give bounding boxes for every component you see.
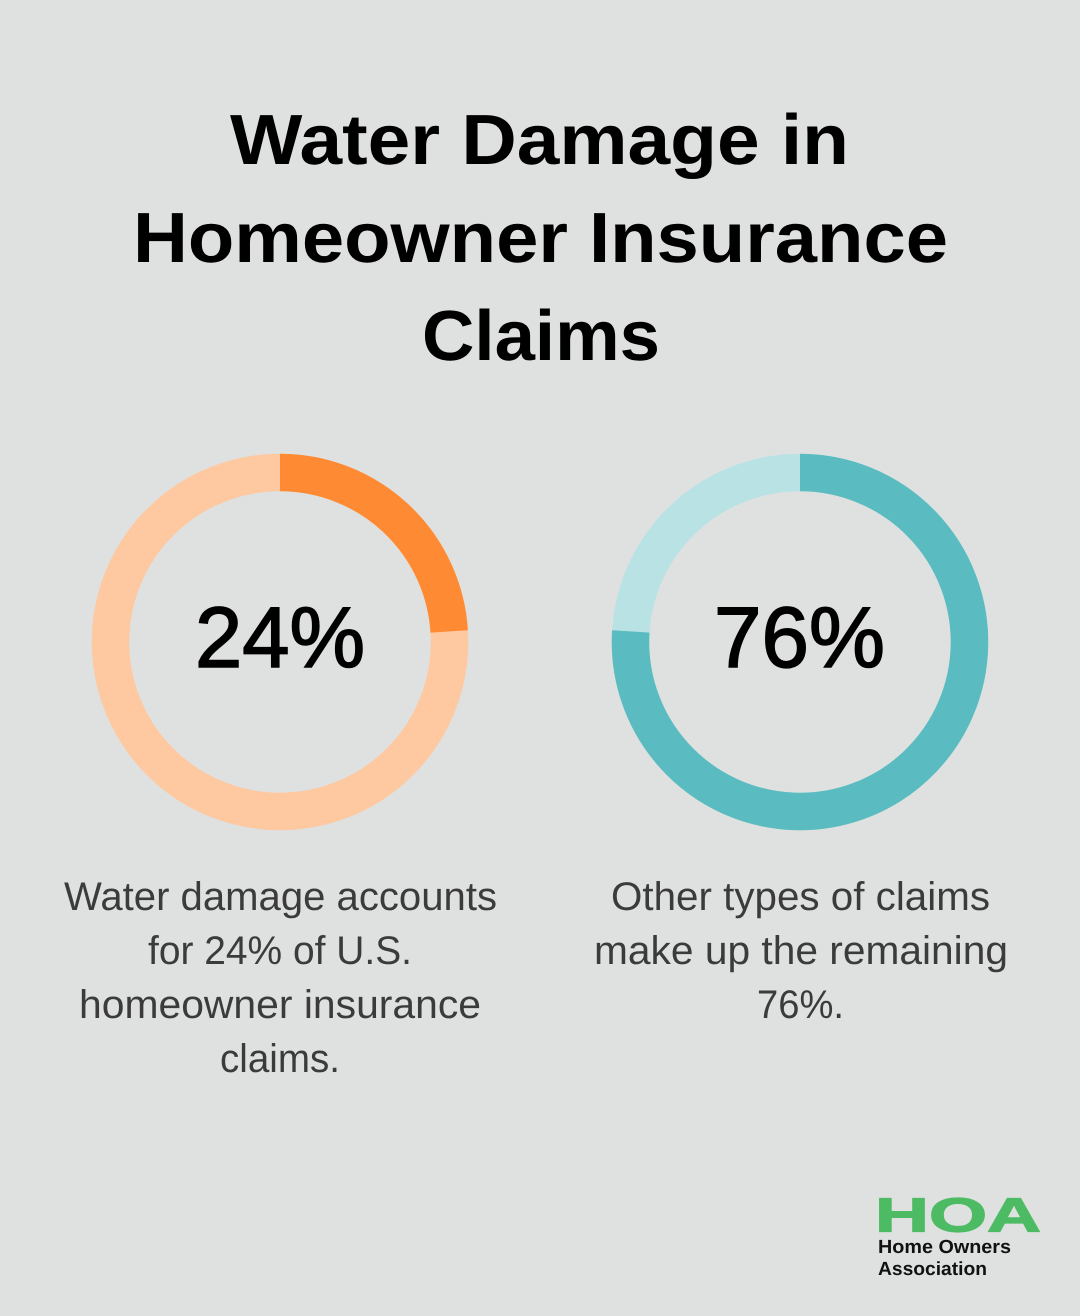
- stat: 76%: 76%: [714, 590, 885, 686]
- description: water damage: Water damage accounts: [64, 875, 497, 919]
- title: Claims: [422, 297, 660, 376]
- donut chart: 76%: [630, 472, 970, 812]
- logo: HOA Home Owners Association: [875, 1190, 1041, 1280]
- donut chart: 24%: [110, 472, 450, 812]
- title: [133, 101, 948, 376]
- description: water damage: claims.: [220, 1037, 340, 1081]
- logo: HOA Home Owners Association: Home Owners: [878, 1237, 1011, 1258]
- stat: 24%: 24%: [195, 590, 365, 686]
- title: Homeowner Insurance: [133, 199, 948, 278]
- description: water damage: homeowner insurance: [79, 983, 481, 1027]
- panel: water damage share: [64, 472, 497, 1081]
- description: other claims: 76%.: [757, 983, 844, 1027]
- description: other claims: Other types of claims: [611, 875, 990, 919]
- description: other claims: make up the remaining: [594, 929, 1008, 973]
- description: water damage: for 24% of U.S.: [148, 929, 412, 973]
- panel: other claims share: [594, 472, 1008, 1027]
- logo: HOA Home Owners Association: Association: [878, 1259, 987, 1280]
- description: water damage: [64, 875, 497, 1081]
- logo: HOA Home Owners Association: HOA: [875, 1190, 1041, 1242]
- title: Water Damage in: [230, 101, 849, 180]
- description: other claims: [594, 875, 1008, 1027]
